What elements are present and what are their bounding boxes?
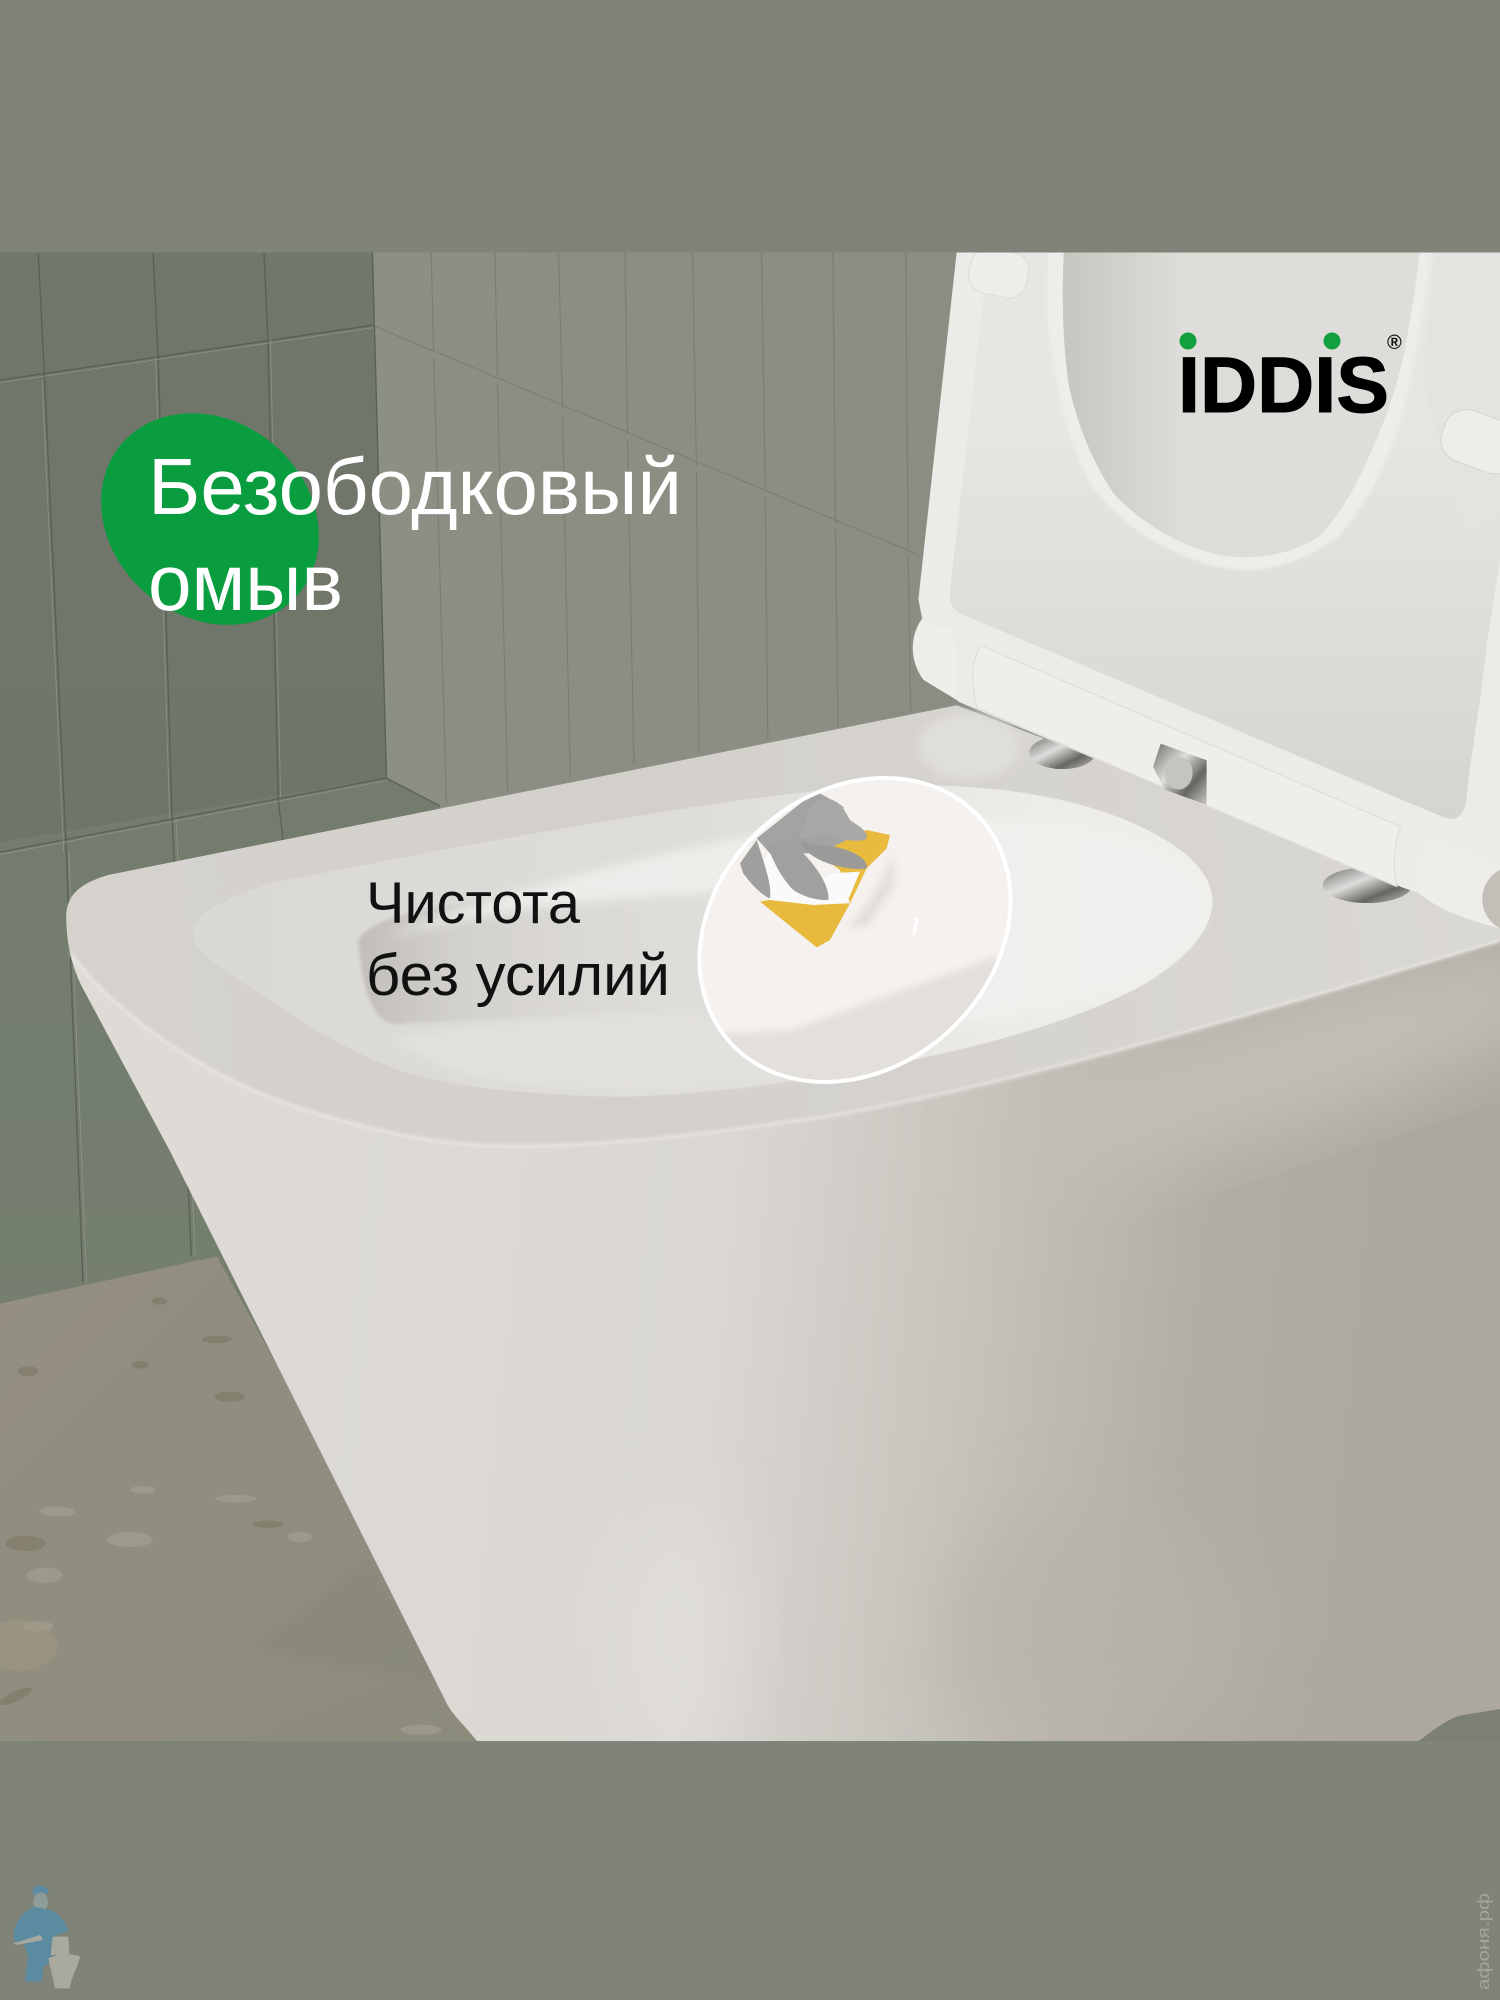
sponge bbox=[760, 898, 850, 947]
IDDIS logo: IDDIS bbox=[1178, 340, 1389, 429]
product photo: toilet in tiled bathroom bbox=[0, 244, 1500, 1786]
bottom band bbox=[0, 1741, 1500, 2000]
glove bbox=[757, 793, 847, 853]
magnifier lens bbox=[698, 776, 1012, 1084]
bowl inner opening bbox=[358, 904, 490, 1025]
hinge feet bbox=[1029, 736, 1412, 903]
icon: gloved hand with sponge bbox=[740, 793, 893, 947]
heading: омыв bbox=[148, 538, 343, 627]
toilet body bbox=[66, 705, 1500, 1786]
bowl bbox=[314, 786, 1212, 1096]
top band bbox=[0, 0, 1500, 252]
mascot: plumber with toilet bbox=[13, 1886, 80, 1988]
rim surface bbox=[66, 705, 1500, 1146]
green blob accent bbox=[58, 369, 362, 669]
seat opening bbox=[1076, 441, 1390, 570]
stone floor bbox=[0, 1256, 485, 1741]
lid bumpers bbox=[968, 252, 1030, 298]
left wall tiles bbox=[0, 253, 440, 1403]
subheading: без усилий bbox=[366, 943, 670, 1008]
subheading bbox=[366, 871, 670, 1008]
heading bbox=[148, 442, 682, 627]
raised seat lid with hinge bar bbox=[913, 244, 1500, 929]
heading: Безободковый bbox=[148, 442, 682, 531]
rim reflections bbox=[918, 713, 1020, 779]
hinge recess bbox=[973, 645, 1401, 886]
subheading: Чистота bbox=[366, 871, 581, 936]
recessed lid panel bbox=[950, 481, 1500, 819]
watermark: афоня.рф bbox=[1474, 1893, 1493, 1990]
right wall tiles bbox=[373, 252, 1045, 808]
bottom right wall strip bbox=[1418, 1709, 1500, 1741]
IDDIS logo: ® bbox=[1387, 332, 1402, 354]
hinge clip bbox=[1153, 744, 1207, 805]
